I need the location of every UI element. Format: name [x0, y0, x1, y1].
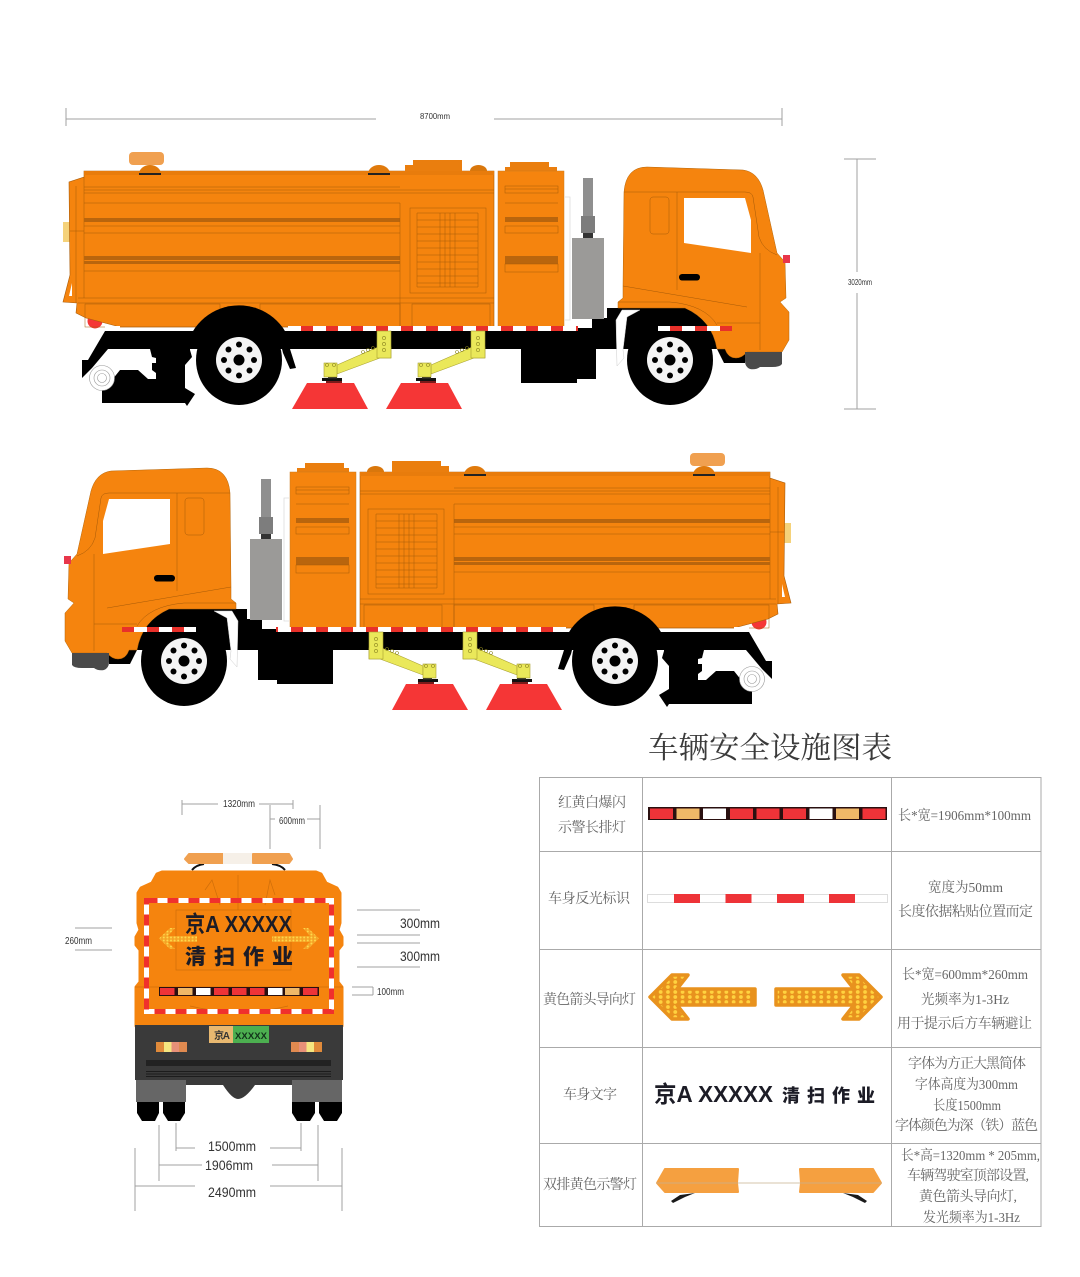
- row 3: yellow arrow guide lights: 黄色箭头导向灯: [543, 991, 636, 1008]
- row 1: long flash light bar: 红黄白爆闪: [558, 794, 626, 811]
- row 2: reflective marking: 车身反光标识: [548, 890, 631, 907]
- licence plate: [209, 1026, 269, 1043]
- dimension: overall height 3020mm: [844, 159, 876, 409]
- label 600mm: 600mm: [279, 816, 305, 827]
- body text: [185, 911, 293, 969]
- sweeping brush one: [292, 331, 391, 409]
- title: 车辆安全设施图表: [648, 732, 892, 765]
- row 3: yellow arrow guide lights: 用于提示后方车辆避让: [897, 1015, 1032, 1032]
- water tank body: [63, 171, 494, 327]
- reflective strip: [105, 326, 578, 331]
- tail lights right: [291, 1042, 322, 1052]
- row 4: body lettering: 车身文字: [563, 1087, 617, 1103]
- rear view dimensions: [65, 799, 440, 1211]
- mud guards: [136, 1080, 342, 1102]
- row 3: yellow arrow guide lights: [543, 967, 1032, 1032]
- table grid: [539, 777, 1041, 1227]
- truck: left side view: [64, 453, 791, 710]
- body text: 京A XXXXX: [185, 911, 293, 937]
- rear wheel arch: [186, 305, 292, 349]
- exhaust and filter: [565, 178, 604, 320]
- row 5: double row beacon: 发光频率为1-3Hz: [923, 1209, 1020, 1226]
- front wheel: [627, 315, 713, 405]
- row 3: yellow arrow guide lights: 光频率为1-3Hz: [921, 991, 1009, 1008]
- dimension: overall height 3020mm: 3020mm: [848, 277, 872, 287]
- tail lights left: [156, 1042, 187, 1052]
- tank top fittings: [129, 152, 487, 175]
- row 2: reflective marking: 宽度为50mm: [928, 879, 1003, 896]
- row 5: double row beacon: 黄色箭头导向灯,: [919, 1188, 1017, 1205]
- safety facilities table: [539, 777, 1041, 1227]
- label 100mm: 100mm: [377, 987, 404, 998]
- cab: [618, 167, 790, 369]
- row 2: reflective marking: [548, 879, 1033, 920]
- row 4: body lettering: 长度1500mm: [933, 1097, 1001, 1114]
- row 4: body lettering: [563, 1055, 1038, 1134]
- roof beacon: [185, 853, 292, 870]
- dimension: overall length 8700mm: [66, 108, 782, 126]
- rear body: [135, 872, 343, 1026]
- label 1500mm: 1500mm: [208, 1138, 256, 1154]
- row 5: double row beacon: [543, 1147, 1040, 1226]
- front reflective strip: [658, 326, 732, 331]
- chassis frame: [105, 308, 745, 383]
- rear tyres: [137, 1102, 342, 1121]
- row 4: body lettering: 字体高度为300mm: [915, 1076, 1018, 1093]
- row 4: body lettering: 京A XXXXX: [654, 1081, 774, 1107]
- label 1320mm: 1320mm: [223, 799, 255, 810]
- row 5: double row beacon: 双排黄色示警灯: [543, 1176, 637, 1193]
- row 2: reflective marking: 长度依据粘贴位置而定: [898, 903, 1033, 920]
- row 4: body lettering: 字体为方正大黑简体: [908, 1055, 1026, 1072]
- rear wheel: [196, 315, 282, 405]
- flash light bar: [159, 987, 319, 996]
- dimension: overall length 8700mm: 8700mm: [420, 111, 450, 121]
- row 4: body lettering: 清扫作业: [782, 1085, 875, 1106]
- front mud guard: [616, 310, 640, 366]
- row 5: double row beacon: 车辆驾驶室顶部设置,: [907, 1167, 1029, 1184]
- body text: 清扫作业: [185, 946, 293, 969]
- reflective frame: [146, 900, 332, 1012]
- yellow rear marker: [63, 222, 71, 242]
- truck: right side view: [63, 152, 790, 409]
- label 1906mm: 1906mm: [205, 1157, 253, 1173]
- label 300mm lower: 300mm: [400, 948, 440, 964]
- truck: rear view: [135, 853, 343, 1121]
- licence plate: XXXXX: [235, 1031, 268, 1042]
- row 4: body lettering: 字体颜色为深（铁）蓝色: [895, 1117, 1038, 1134]
- tank louvre vent: [410, 208, 486, 293]
- rear sweeper assembly: [82, 331, 195, 406]
- second tank box: [498, 162, 564, 327]
- right arrow light: [272, 928, 319, 949]
- mud flap: [282, 349, 296, 369]
- left arrow light: [159, 928, 197, 949]
- row 3: yellow arrow guide lights: 长*宽=600mm*260mm: [902, 967, 1028, 983]
- lower bumper: [135, 1025, 343, 1099]
- row 5: double row beacon: 长*高=1320mm * 205mm,: [901, 1147, 1040, 1164]
- label 300mm upper: 300mm: [400, 915, 440, 931]
- row 1: long flash light bar: 长*宽=1906mm*100mm: [898, 808, 1031, 824]
- row 1: long flash light bar: [558, 794, 1031, 836]
- rear red lamp: [88, 314, 102, 328]
- label 260mm: 260mm: [65, 936, 92, 947]
- label 2490mm: 2490mm: [208, 1184, 256, 1200]
- sweeping brush two: [386, 331, 485, 409]
- licence plate: 京A: [214, 1029, 230, 1042]
- row 1: long flash light bar: 示警长排灯: [558, 819, 626, 836]
